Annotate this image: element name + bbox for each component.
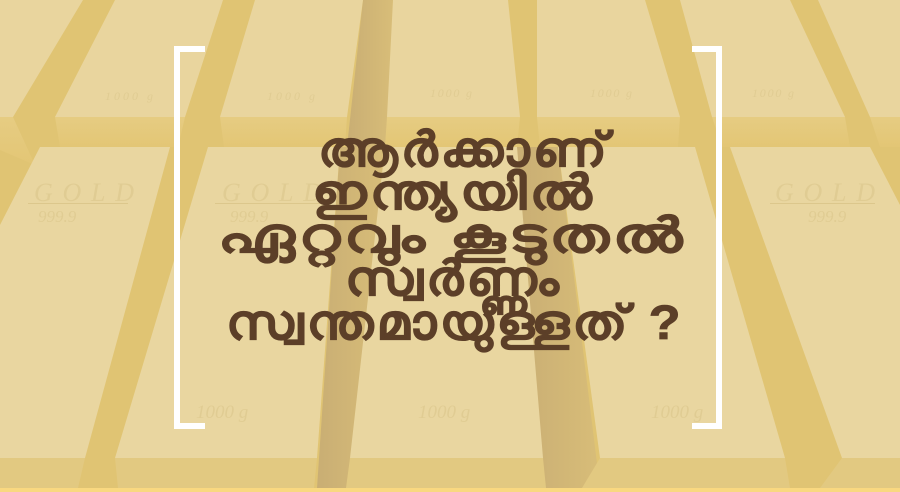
embossed bar stamps: 1000 g xyxy=(651,402,703,423)
front row bars xyxy=(0,147,900,458)
embossed bar stamps: 1000 g xyxy=(418,402,470,423)
front row front faces xyxy=(0,458,900,488)
embossed bar stamps: 999.9 xyxy=(230,207,269,226)
bottom strip xyxy=(0,488,900,492)
title text xyxy=(218,124,686,352)
embossed bar stamps: 999.9 xyxy=(38,207,77,226)
title text: സ്വർണ്ണം xyxy=(345,253,562,316)
embossed bar stamps: GOLD xyxy=(34,178,134,207)
embossed bar stamps: 1000 g xyxy=(590,86,632,100)
embossed bar stamps: 999.9 xyxy=(808,207,847,226)
grey shaded gaps xyxy=(317,0,600,488)
back row front faces xyxy=(0,117,900,165)
embossed bar stamps: GOLD xyxy=(222,178,322,207)
title text: സ്വന്തമായുള്ളത് ? xyxy=(226,297,684,352)
embossed bar stamps xyxy=(28,86,875,423)
embossed bar stamps: 1000 g xyxy=(105,89,153,103)
embossed bar stamps: 1000 g xyxy=(430,86,472,100)
embossed bar stamps: 1000 g xyxy=(267,89,315,103)
back row bars xyxy=(0,0,900,117)
title text: ഏറ്റവും കൂടുതൽ xyxy=(218,210,686,268)
embossed bar stamps: 1000 g xyxy=(196,402,248,423)
right bracket xyxy=(692,49,719,426)
title text: ആർക്കാണ് xyxy=(318,124,614,178)
left bracket xyxy=(177,49,205,426)
embossed bar stamps: 1000 g xyxy=(752,86,794,100)
title text: ഇന്ത്യയിൽ xyxy=(312,167,595,222)
embossed bar stamps: GOLD xyxy=(775,178,875,207)
